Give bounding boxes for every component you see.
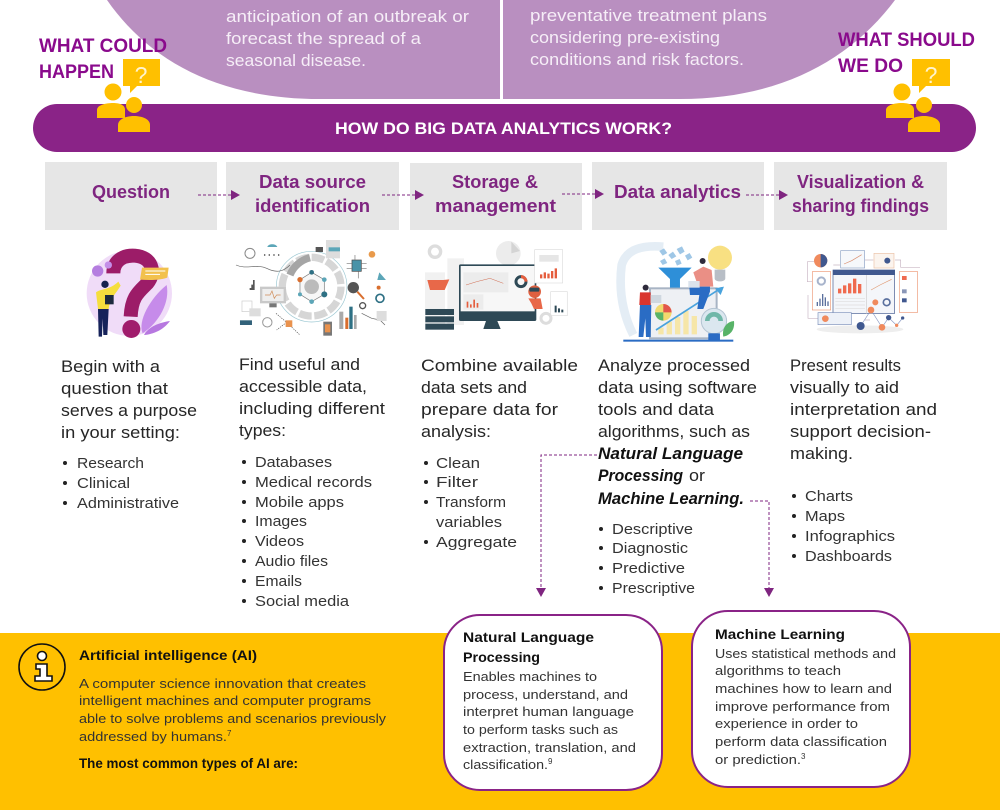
text block: data analytics: tools and data	[598, 401, 715, 419]
step: question: Question	[92, 182, 170, 202]
text block: question: serves a purpose	[61, 402, 197, 420]
step: question	[45, 162, 217, 230]
list: data types: Audio files	[255, 553, 328, 570]
icon: information	[19, 644, 65, 690]
card: machine learning: experience in order to	[715, 716, 858, 731]
text block: data analytics: data using software	[598, 379, 757, 397]
list: output formats: Maps	[805, 508, 845, 525]
list: analytics types: Diagnostic	[612, 540, 689, 557]
text block: storage	[421, 357, 578, 551]
list: data types: Social media	[255, 593, 350, 610]
text: AI definition: Artificial intelligence (AI)	[79, 647, 257, 663]
text block: data analytics: Analyze processed	[598, 357, 750, 375]
text block: data analytics: algorithms, such as	[598, 423, 750, 441]
arrow: question to data source	[198, 190, 240, 200]
step: visualization and sharing findings: sharing findings	[792, 196, 929, 216]
step: visualization and sharing findings: Visualization &	[797, 172, 924, 192]
step: data source identification: Data source	[259, 172, 366, 192]
card: natural language processing: interpret human language	[463, 704, 634, 719]
list: data types: Videos	[255, 533, 304, 550]
card: natural language processing: process, understand, and	[463, 687, 628, 702]
text: prescriptive description: preventative treatment plans	[530, 7, 767, 25]
illustration: data funnel and analysts	[621, 246, 734, 342]
text: prescriptive description	[530, 7, 767, 69]
list: question settings: Clinical	[77, 475, 130, 492]
list: output formats: Charts	[805, 488, 853, 505]
connector: machine learning	[750, 501, 774, 597]
text: AI definition	[79, 647, 387, 771]
list: analytics types: Predictive	[612, 560, 685, 577]
card: natural language processing: Enables machines to	[463, 669, 597, 684]
list: analytics types	[599, 521, 695, 597]
card: machine learning: Uses statistical methods and	[715, 646, 896, 661]
heading: what could happen: WHAT COULD	[39, 36, 167, 57]
arrow: storage to analytics	[562, 189, 604, 199]
text block: visualization: making.	[790, 445, 853, 463]
card: machine learning: or prediction.	[715, 752, 801, 767]
step: data analytics	[592, 162, 764, 230]
list: data types	[242, 454, 372, 610]
text: AI definition: The most common types of AI are:	[79, 756, 298, 771]
card: machine learning: improve performance from	[715, 699, 890, 714]
card: natural language processing: Processing	[463, 649, 540, 665]
text: AI definition: intelligent machines and computer programs	[79, 693, 372, 708]
card: natural language processing: classification.	[463, 757, 548, 772]
step: visualization and sharing findings	[774, 162, 947, 230]
step: data source identification	[226, 162, 399, 230]
text block: storage: prepare data for	[421, 401, 559, 419]
text block: data sources: Find useful and	[239, 356, 360, 374]
text: predictive description: forecast the spread of a	[226, 30, 422, 48]
icon: people with question bubble left: ?	[135, 62, 147, 88]
list: preparation steps: Transform	[436, 494, 506, 511]
list: data types: Databases	[255, 454, 332, 471]
card: natural language processing: 9	[548, 757, 553, 766]
text block: storage: data sets and	[421, 379, 527, 397]
text block: visualization: Present results	[790, 357, 901, 375]
text: predictive description	[226, 8, 470, 70]
heading: what could happen	[39, 36, 167, 83]
text: AI definition: able to solve problems and scenarios previously	[79, 711, 387, 726]
list: data types: Emails	[255, 573, 302, 590]
text block: data analytics: Processing	[598, 467, 683, 485]
text block: visualization: support decision-	[790, 423, 931, 441]
illustration: dashboard	[807, 251, 920, 333]
card: machine learning: perform data classification	[715, 734, 887, 749]
list: preparation steps: variables	[436, 514, 502, 531]
list: data types: Mobile apps	[255, 494, 344, 511]
text block: question	[61, 358, 197, 512]
text: AI definition: 7	[227, 729, 232, 738]
text: AI definition: addressed by humans.	[79, 729, 227, 744]
list: analytics types: Descriptive	[612, 521, 693, 538]
illustration: data sources network	[236, 240, 387, 336]
text: predictive description: seasonal disease.	[226, 52, 366, 70]
list: question settings	[63, 455, 179, 512]
text block: data sources: types:	[239, 422, 286, 440]
list: preparation steps: Clean	[436, 455, 480, 472]
list: preparation steps: Filter	[436, 474, 478, 491]
text block: data analytics	[598, 357, 757, 597]
list: output formats: Infographics	[805, 528, 895, 545]
text block: data analytics: or	[689, 467, 706, 485]
list: output formats: Dashboards	[805, 548, 892, 565]
card: natural language processing: Natural Language	[463, 629, 594, 645]
heading: what should we do: WHAT SHOULD	[838, 30, 975, 51]
step: storage and management: Storage &	[452, 172, 538, 192]
heading: what should we do: WE DO	[838, 56, 903, 77]
text block: visualization	[790, 357, 937, 565]
list: data types: Medical records	[255, 474, 372, 491]
list: question settings: Research	[77, 455, 144, 472]
list: preparation steps	[424, 455, 517, 551]
arrow: analytics to visualization	[746, 190, 788, 200]
card: machine learning: 3	[801, 752, 806, 761]
banner	[33, 104, 976, 152]
text block: storage: analysis:	[421, 423, 491, 441]
heading: what should we do	[838, 30, 975, 77]
list: data types: Images	[255, 513, 307, 530]
text block: question: in your setting:	[61, 424, 180, 442]
heading: what could happen: HAPPEN	[39, 62, 114, 83]
panel: artificial intelligence band	[0, 633, 1000, 810]
text block: data analytics: Natural Language	[598, 445, 743, 463]
card: machine learning: Machine Learning	[715, 626, 845, 642]
connector: natural language processing	[536, 455, 597, 597]
step: storage and management	[410, 163, 582, 230]
list: question settings: Administrative	[77, 495, 179, 512]
list: output formats	[792, 488, 895, 565]
step: data analytics: Data analytics	[614, 182, 741, 202]
banner: HOW DO BIG DATA ANALYTICS WORK?	[335, 119, 672, 138]
text block: data sources	[239, 356, 385, 610]
list: preparation steps: Aggregate	[436, 534, 517, 551]
card: machine learning	[692, 611, 910, 787]
card: natural language processing: to perform tasks such as	[463, 722, 619, 737]
card: natural language processing: extraction, translation, and	[463, 740, 636, 755]
text block: data sources: including different	[239, 400, 385, 418]
text block: data analytics: Machine Learning.	[598, 490, 744, 508]
card: machine learning: algorithms to teach	[715, 663, 841, 678]
text block: storage: Combine available	[421, 357, 578, 375]
list: analytics types: Prescriptive	[612, 580, 695, 597]
text block: data sources: accessible data,	[239, 378, 367, 396]
text: prescriptive description: considering pre-existing	[530, 29, 720, 47]
text: predictive description: anticipation of an outbreak or	[226, 8, 470, 26]
text block: visualization: interpretation and	[790, 401, 937, 419]
card: machine learning: machines how to learn and	[715, 681, 892, 696]
text: AI definition: A computer science innovation that creates	[79, 676, 367, 691]
step: data source identification: identification	[255, 196, 370, 216]
illustration: storage and monitor	[425, 241, 567, 330]
card: natural language processing	[444, 615, 662, 790]
icon: people with question bubble left	[97, 59, 160, 132]
panel: predictive and prescriptive analytics	[107, 0, 895, 99]
icon: people with question bubble right: ?	[925, 62, 937, 88]
text block: question: Begin with a	[61, 358, 161, 376]
text block: visualization: visually to aid	[790, 379, 899, 397]
arrow: data source to storage	[382, 190, 424, 200]
text: prescriptive description: conditions and risk factors.	[530, 51, 744, 69]
text block: question: question that	[61, 380, 168, 398]
icon: people with question bubble right	[886, 59, 950, 132]
illustration: person and question mark	[87, 251, 172, 338]
step: storage and management: management	[435, 196, 556, 216]
